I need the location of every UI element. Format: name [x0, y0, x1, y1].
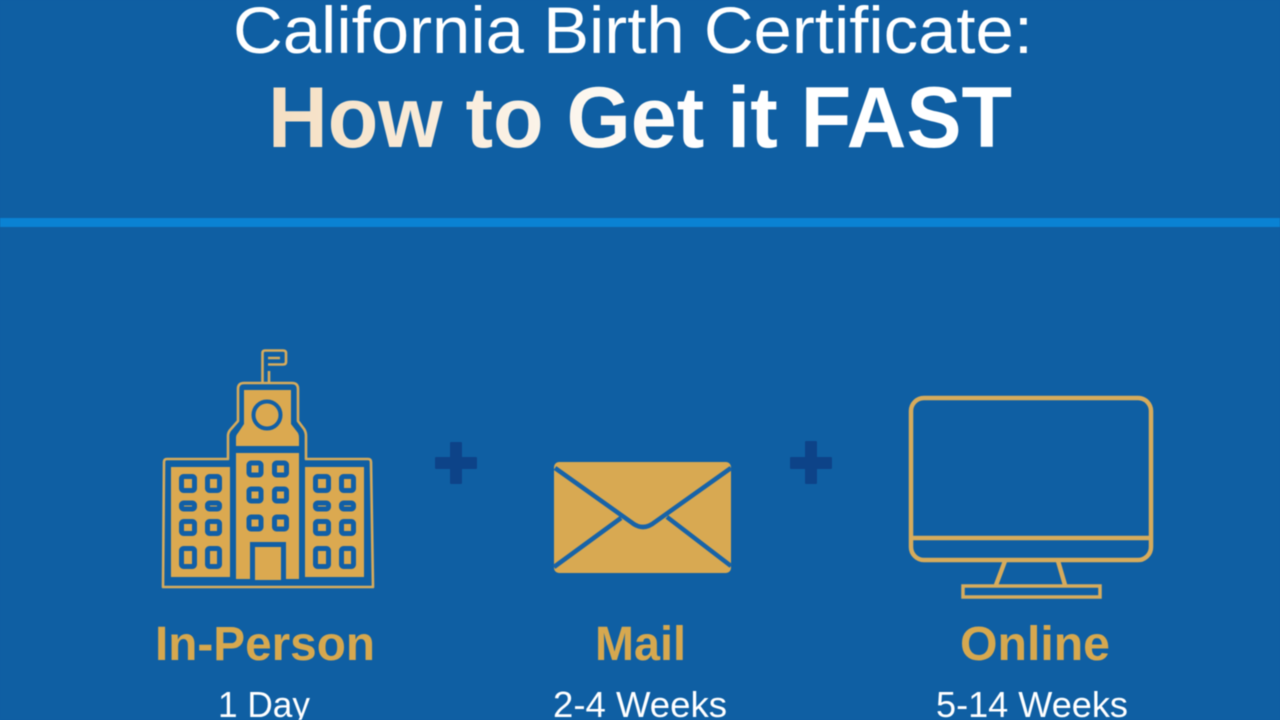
envelope flap lines — [554, 468, 731, 567]
monitor stand — [996, 561, 1065, 585]
label: mail: Mail — [595, 618, 686, 671]
label: online: Online — [960, 618, 1110, 671]
monitor base — [963, 586, 1100, 597]
right wing — [305, 467, 364, 577]
monitor chin line — [911, 536, 1151, 540]
door — [252, 544, 284, 580]
building outer outline — [163, 383, 373, 587]
left wing — [171, 467, 230, 577]
icon: desktop monitor — [911, 398, 1151, 597]
tower clock — [254, 402, 280, 428]
icon: government building — [163, 350, 373, 587]
icon: plus between in-person and mail — [436, 443, 476, 483]
monitor frame — [911, 398, 1151, 560]
icon: plus between mail and online — [791, 442, 831, 483]
centre block — [236, 453, 299, 579]
envelope body — [554, 462, 731, 573]
icon: envelope — [554, 462, 731, 573]
windows — [182, 463, 354, 566]
flag — [262, 350, 286, 382]
title: second line: How to Get it FAST — [268, 70, 1012, 166]
tower — [236, 390, 299, 446]
label: in-person: In-Person — [155, 618, 375, 671]
